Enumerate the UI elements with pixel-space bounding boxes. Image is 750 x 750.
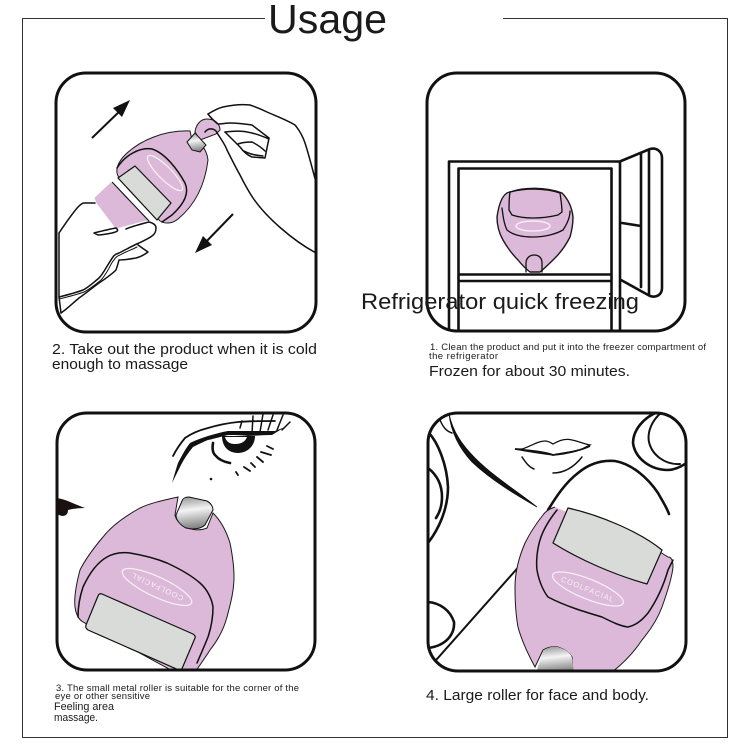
panel: step 1 refrigerator — [361, 73, 706, 380]
large eye — [172, 414, 290, 483]
grey pad — [118, 166, 171, 220]
caption: 4. Large roller for face and body. — [426, 688, 649, 704]
left hand — [59, 203, 156, 313]
illustration: two hands opening the roller — [59, 100, 316, 313]
illustration: roller near eye — [56, 414, 290, 675]
top cap — [509, 189, 562, 218]
logo ellipse — [146, 154, 184, 192]
small metal roller — [537, 646, 574, 670]
caption: 3. The small metal roller is suitable for the corner of the — [56, 683, 299, 694]
caption: massage. — [54, 712, 98, 724]
caption: Frozen for about 30 minutes. — [429, 364, 630, 380]
small metal roller — [176, 497, 213, 529]
caption — [54, 683, 299, 724]
seam line along pad — [112, 182, 149, 221]
caption: 2. Take out the product when it is cold — [52, 342, 317, 358]
small metal roller — [187, 133, 206, 152]
logo — [549, 565, 627, 613]
logo ellipse — [516, 221, 550, 231]
grey pad — [86, 594, 195, 671]
caption: enough to massage — [52, 357, 188, 373]
inner housing curve — [537, 510, 673, 627]
illustration: product in freezer — [449, 149, 662, 335]
caption — [52, 342, 317, 373]
pink cap at small roller — [195, 119, 220, 140]
panel: step 2 take out the product — [52, 73, 317, 373]
logo — [122, 568, 192, 606]
logo: COOLFACIAL — [129, 570, 185, 603]
caption: 1. Clean the product and put it into the freezer compartment of — [430, 342, 706, 353]
device body — [117, 131, 208, 223]
caption: eye or other sensitive — [55, 691, 150, 702]
small eye at left edge — [56, 498, 85, 516]
device body — [515, 507, 673, 675]
panel outline — [428, 413, 686, 671]
right hand — [205, 105, 316, 253]
face and neck line art — [428, 412, 688, 668]
device body — [75, 497, 234, 675]
caption: the refrigerator — [429, 351, 498, 362]
arrow: down left — [195, 214, 233, 253]
panel: step 4 large roller — [426, 412, 688, 704]
illustration: roller on neck — [428, 412, 688, 675]
housing curve — [502, 208, 570, 237]
inner housing curve — [117, 149, 187, 222]
grey pad — [553, 508, 662, 584]
pink roller cap held in left hand — [95, 183, 147, 228]
small roller cap — [526, 255, 542, 272]
arrow: up right — [92, 100, 130, 138]
overlay label: Refrigerator quick freezing — [361, 289, 639, 314]
caption — [429, 342, 706, 380]
lips — [515, 439, 590, 473]
panel: step 3 small metal roller — [54, 413, 315, 724]
panel outline — [427, 73, 685, 331]
logo: COOLFACIAL — [560, 575, 616, 604]
caption: Feeling area — [54, 701, 115, 713]
panel outline — [57, 413, 315, 670]
refrigerator door — [621, 149, 662, 297]
product body — [497, 188, 573, 272]
inner housing curve — [78, 553, 213, 663]
refrigerator — [449, 162, 620, 335]
panel outline — [56, 73, 316, 332]
